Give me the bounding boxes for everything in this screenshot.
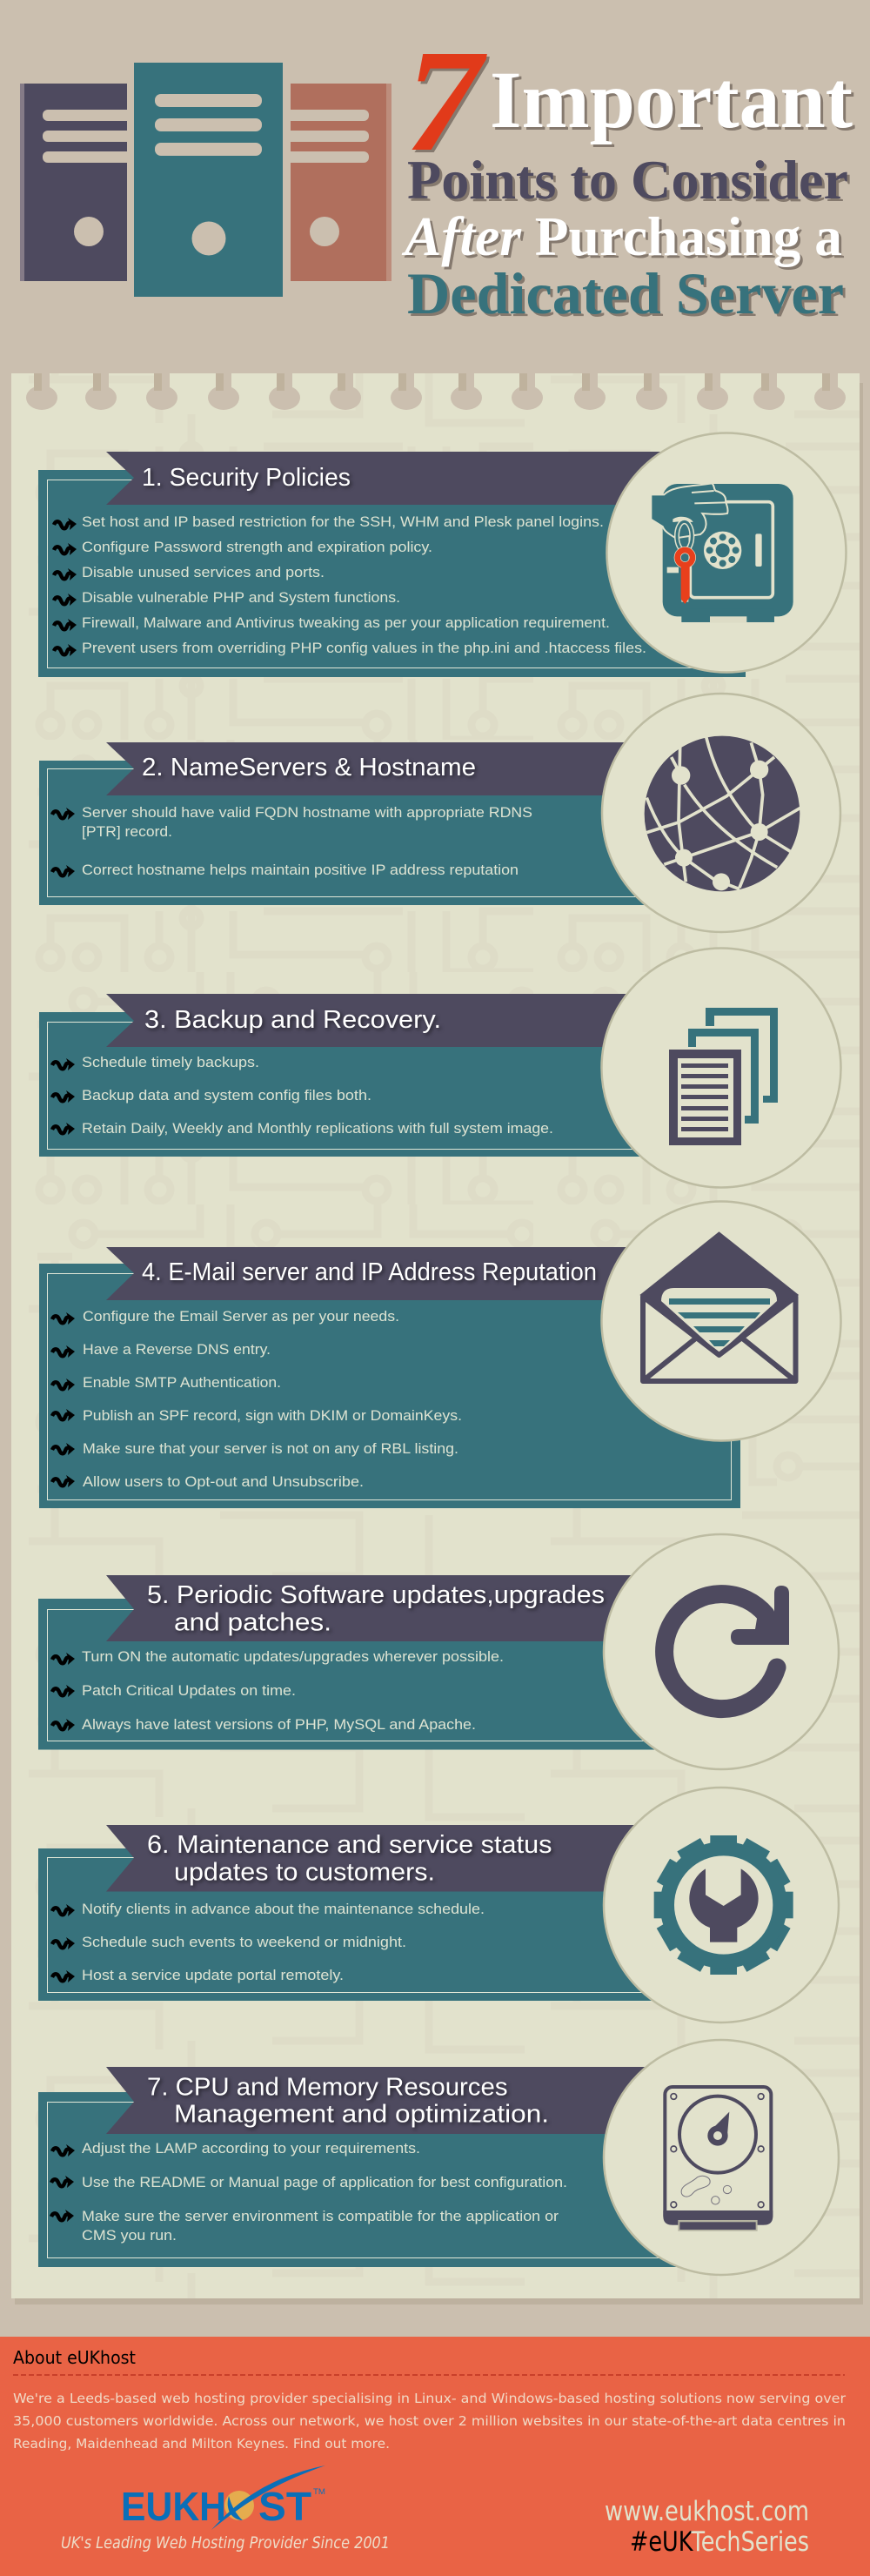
spiral binding holes (26, 373, 846, 410)
bullet list: Firewall, Malware and Antivirus tweaking as per your application requirement. (82, 614, 610, 631)
bullet list: Retain Daily, Weekly and Monthly replications with full system image. (82, 1120, 553, 1137)
heading (147, 1581, 605, 1636)
heading: and patches. (174, 1608, 331, 1636)
inner outline (47, 480, 696, 668)
title: Points to Consider (407, 149, 848, 211)
panel: 1 security policies (38, 433, 846, 677)
panel: 5 software updates (38, 1534, 839, 1769)
bullet list: Always have latest versions of PHP, MySQL and Apache. (82, 1716, 476, 1733)
title: Important (490, 56, 853, 145)
website url: www.eukhost.com (605, 2496, 809, 2527)
bullet list (52, 1901, 485, 1983)
about paragraph (13, 2391, 847, 2452)
paper sheet (11, 373, 863, 2304)
logo: eUKhost: EUKH (121, 2484, 226, 2529)
title: Dedicated Server (407, 260, 844, 326)
panel body (39, 1012, 696, 1157)
bullet list: Server should have valid FQDN hostname with appropriate RDNS (82, 804, 532, 821)
logo: eUKhost (121, 2465, 325, 2530)
circle badge (604, 1534, 839, 1769)
circle badge (602, 694, 840, 932)
inner outline (47, 2103, 696, 2257)
bullet list: Turn ON the automatic updates/upgrades wherever possible. (82, 1648, 504, 1665)
bullet list (51, 2140, 567, 2244)
bullet list: Publish an SPF record, sign with DKIM or DomainKeys. (83, 1407, 462, 1424)
ribbon (106, 994, 696, 1047)
heading: 5. Periodic Software updates,upgrades (147, 1581, 605, 1609)
heading: updates to customers. (174, 1859, 435, 1887)
heading: Management and optimization. (174, 2101, 549, 2129)
bullet list: Use the README or Manual page of application for best configuration. (82, 2174, 567, 2190)
inner outline (47, 1274, 731, 1500)
panel: 3 backup and recovery (39, 949, 840, 1187)
bullet list: Disable vulnerable PHP and System functions. (82, 589, 400, 606)
title: 7 (405, 20, 487, 182)
inner outline (47, 1022, 696, 1149)
footer band (0, 2337, 870, 2576)
bullet list (52, 1648, 504, 1733)
panel: 6 maintenance and status updates (38, 1788, 839, 2023)
bullet list: Host a service update portal remotely. (82, 1967, 344, 1983)
bullet list: Schedule timely backups. (82, 1054, 259, 1070)
bullet list (52, 1054, 553, 1137)
ribbon (106, 1575, 696, 1641)
tagline: UK's Leading Web Hosting Provider Since 2001 (61, 2533, 390, 2553)
icon: three server towers (20, 52, 392, 305)
title (401, 20, 853, 326)
bullet list: Make sure the server environment is compatible for the application or (82, 2208, 559, 2224)
bullet list: Notify clients in advance about the maintenance schedule. (82, 1901, 485, 1917)
logo: eUKhost: ST (258, 2484, 311, 2529)
bullet list: Enable SMTP Authentication. (83, 1374, 281, 1391)
bullet list: Configure the Email Server as per your needs. (83, 1308, 399, 1325)
inner outline (47, 1610, 696, 1741)
heading (147, 1831, 552, 1887)
bullet list: Prevent users from overriding PHP config values in the php.ini and .htaccess files. (82, 640, 646, 656)
inner outline (47, 769, 696, 896)
bullet list: Adjust the LAMP according to your requirements. (82, 2140, 420, 2157)
bullet list: Backup data and system config files both. (82, 1087, 371, 1104)
circle badge (607, 433, 846, 672)
heading: 6. Maintenance and service status (147, 1831, 552, 1859)
bullet list: Configure Password strength and expiration policy. (82, 539, 432, 555)
bullet list: Allow users to Opt-out and Unsubscribe. (83, 1473, 364, 1490)
circle badge (602, 949, 840, 1187)
ribbon (106, 1825, 696, 1892)
inner outline (47, 1857, 696, 1993)
heading: 3. Backup and Recovery. (144, 1006, 441, 1034)
heading: 1. Security Policies (142, 464, 351, 492)
icon: network globe (645, 736, 800, 891)
heading: 7. CPU and Memory Resources (147, 2073, 508, 2101)
panel body (38, 470, 746, 677)
bullet list: CMS you run. (82, 2227, 177, 2244)
ribbon (106, 742, 696, 795)
bullet list (52, 804, 532, 878)
bullet list: Patch Critical Updates on time. (82, 1682, 296, 1699)
heading: 2. NameServers & Hostname (142, 754, 476, 782)
panel: 2 nameservers and hostname (39, 694, 840, 932)
panel body (38, 1599, 696, 1749)
heading: 4. E-Mail server and IP Address Reputation (142, 1258, 597, 1286)
icon: gear with wrench (654, 1835, 793, 1975)
about paragraph: Reading, Maidenhead and Milton Keynes. Find out more. (13, 2436, 390, 2452)
bullet list: Schedule such events to weekend or midnight. (82, 1934, 406, 1950)
bullet list: Have a Reverse DNS entry. (83, 1341, 271, 1358)
ribbon (106, 452, 696, 505)
hashtag: #eUKTechSeries (630, 2526, 809, 2558)
icon: open envelope (641, 1232, 797, 1383)
about paragraph: We're a Leeds-based web hosting provider specialising in Linux- and Windows-based hosting solutions now serving over (13, 2391, 847, 2406)
bullet list (52, 1308, 462, 1490)
about paragraph: 35,000 customers worldwide. Across our network, we host over 2 million websites in our state-of-the-art data centres in (13, 2413, 846, 2429)
panel body (38, 1848, 696, 2001)
icon: refresh arrow (665, 1586, 789, 1709)
circle badge (602, 1201, 840, 1441)
panel body (39, 1264, 740, 1508)
panel body (39, 761, 696, 905)
bullet list: Make sure that your server is not on any of RBL listing. (83, 1440, 458, 1457)
bullet list: Disable unused services and ports. (82, 564, 325, 580)
panel: 4 e-mail server and ip reputation (39, 1201, 840, 1508)
bullet list: [PTR] record. (82, 823, 172, 840)
icon: safe with key (651, 483, 793, 623)
bullet list: Correct hostname helps maintain positive IP address reputation (82, 862, 519, 878)
bullet list (54, 513, 646, 656)
title: After Purchasing a (401, 206, 842, 267)
icon: hard disk (663, 2087, 773, 2231)
bullet list: Set host and IP based restriction for the SSH, WHM and Plesk panel logins. (82, 513, 604, 530)
panel body (38, 2092, 696, 2267)
circle badge (604, 1788, 839, 2023)
panel: 7 cpu and memory resources (38, 2040, 839, 2275)
about heading: About eUKhost (13, 2347, 136, 2368)
icon: stacked documents (669, 1008, 778, 1145)
ribbon (106, 1247, 696, 1300)
ribbon (106, 2067, 696, 2134)
logo: eUKhost: TM (313, 2487, 325, 2496)
heading (147, 2073, 549, 2129)
circle badge (604, 2040, 839, 2275)
